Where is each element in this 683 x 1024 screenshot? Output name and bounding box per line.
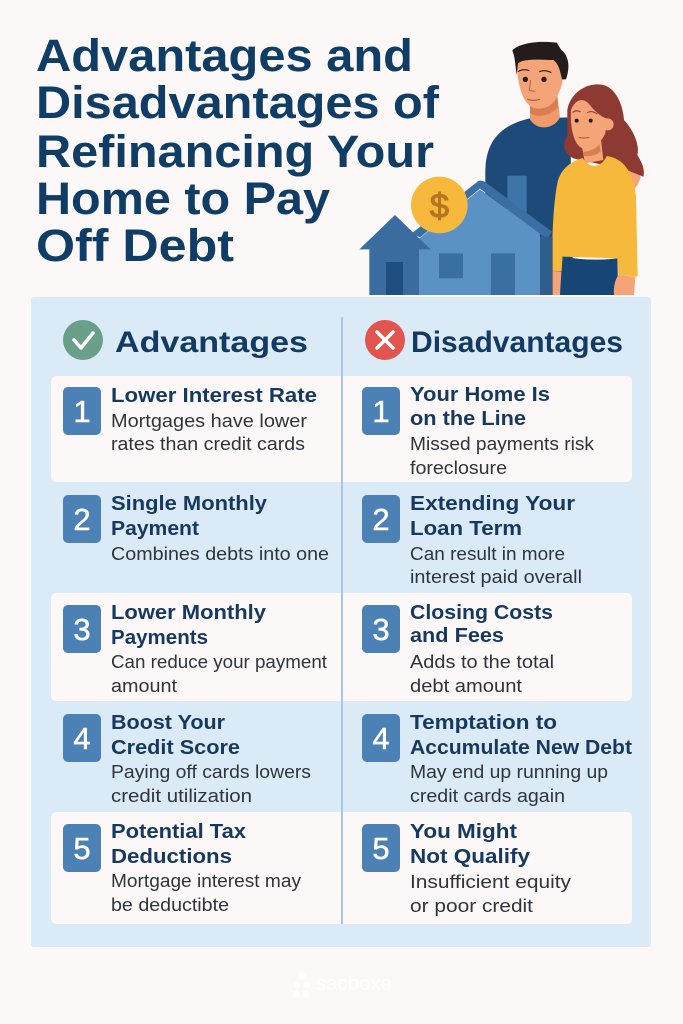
disadvantage 1: foreclosure <box>410 458 507 478</box>
disadvantage 3: and Fees <box>410 624 504 647</box>
advantage 4: 4 <box>73 721 91 756</box>
advantage 2: Combines debts into one <box>111 544 329 564</box>
advantage 3: Can reduce your payment <box>111 652 327 672</box>
disadvantage 1: Missed payments risk <box>410 434 595 454</box>
disadvantage 3: Closing Costs <box>410 601 553 624</box>
disadvantage 5: Not Qualify <box>410 845 531 868</box>
advantage 3 <box>63 601 327 696</box>
man <box>485 42 641 295</box>
woman <box>550 84 644 295</box>
title: Off Debt <box>36 220 234 271</box>
disadvantage 4: 4 <box>372 721 390 756</box>
advantage 2 <box>63 492 329 564</box>
icon: dollar coin: $ <box>430 187 449 225</box>
advantage 2: Payment <box>111 517 199 540</box>
disadvantage 4: Accumulate New Debt <box>410 736 632 759</box>
disadvantage 2: Can result in more <box>410 544 565 564</box>
advantage 1: Mortgages have lower <box>111 411 307 431</box>
advantage 5 <box>63 820 301 915</box>
disadvantage 2: Extending Your <box>410 492 575 515</box>
advantage 5: Deductions <box>111 845 232 868</box>
advantage 4: Boost Your <box>111 711 225 734</box>
disadvantage 3 <box>362 601 554 696</box>
advantage 4: Credit Score <box>111 736 240 759</box>
disadvantage 1: Your Home Is <box>410 383 550 406</box>
disadvantage 4: Temptation to <box>410 711 557 734</box>
heading: advantages: Advantages <box>115 326 308 359</box>
house <box>359 176 553 295</box>
disadvantage 2: Loan Term <box>410 517 522 540</box>
heading: disadvantages: Disadvantages <box>411 326 623 359</box>
heading: advantages <box>63 320 308 360</box>
advantage 4 <box>63 711 311 806</box>
icon: dollar coin <box>411 177 468 233</box>
illustration: couple and house <box>359 42 644 295</box>
disadvantage 5: Insufficient equity <box>410 872 571 892</box>
disadvantage 1: on the Line <box>410 407 526 430</box>
disadvantage 5: You Might <box>410 820 517 843</box>
disadvantage 4: credit cards again <box>410 786 565 806</box>
row backgrounds <box>51 376 632 924</box>
disadvantage 4 <box>362 711 632 806</box>
disadvantage 1: 1 <box>372 394 390 429</box>
advantage 1: 1 <box>73 394 91 429</box>
advantage 3: Lower Monthly <box>111 601 267 624</box>
disadvantage 3: 3 <box>372 612 390 647</box>
disadvantage 3: debt amount <box>410 676 522 696</box>
advantage 3: amount <box>111 676 177 696</box>
title: Home to Pay <box>36 173 330 224</box>
advantage 5: be deductibte <box>111 895 229 915</box>
disadvantage 5: 5 <box>372 831 390 866</box>
disadvantage 2: interest paid overall <box>410 567 582 587</box>
advantage 5: Potential Tax <box>111 820 247 843</box>
disadvantage 2 <box>362 492 582 587</box>
advantage 3: Payments <box>111 626 208 649</box>
advantage 5: 5 <box>73 831 91 866</box>
title: Advantages and <box>36 30 413 81</box>
disadvantage 5: or poor credit <box>410 896 533 916</box>
advantage 1: Lower Interest Rate <box>111 384 317 407</box>
panel: comparison <box>31 297 651 947</box>
advantage 2: 2 <box>73 502 91 537</box>
advantage 4: credit utilization <box>111 786 252 806</box>
advantage 1 <box>63 384 317 454</box>
watermark: sacboxe <box>316 973 392 995</box>
title: Disadvantages of <box>36 77 440 128</box>
disadvantage 4: May end up running up <box>410 762 608 782</box>
disadvantage 2: 2 <box>372 502 390 537</box>
advantage 3: 3 <box>73 612 91 647</box>
advantage 5: Mortgage interest may <box>111 871 301 891</box>
heading: disadvantages <box>365 320 623 360</box>
disadvantage 5 <box>362 820 571 916</box>
title: Refinancing Your <box>36 126 434 177</box>
title <box>36 30 440 271</box>
disadvantage 1 <box>362 383 595 478</box>
advantage 4: Paying off cards lowers <box>111 762 311 782</box>
advantage 1: rates than credit cards <box>111 434 305 454</box>
advantage 2: Single Monthly <box>111 492 268 515</box>
watermark <box>292 972 392 998</box>
disadvantage 3: Adds to the total <box>410 652 554 672</box>
